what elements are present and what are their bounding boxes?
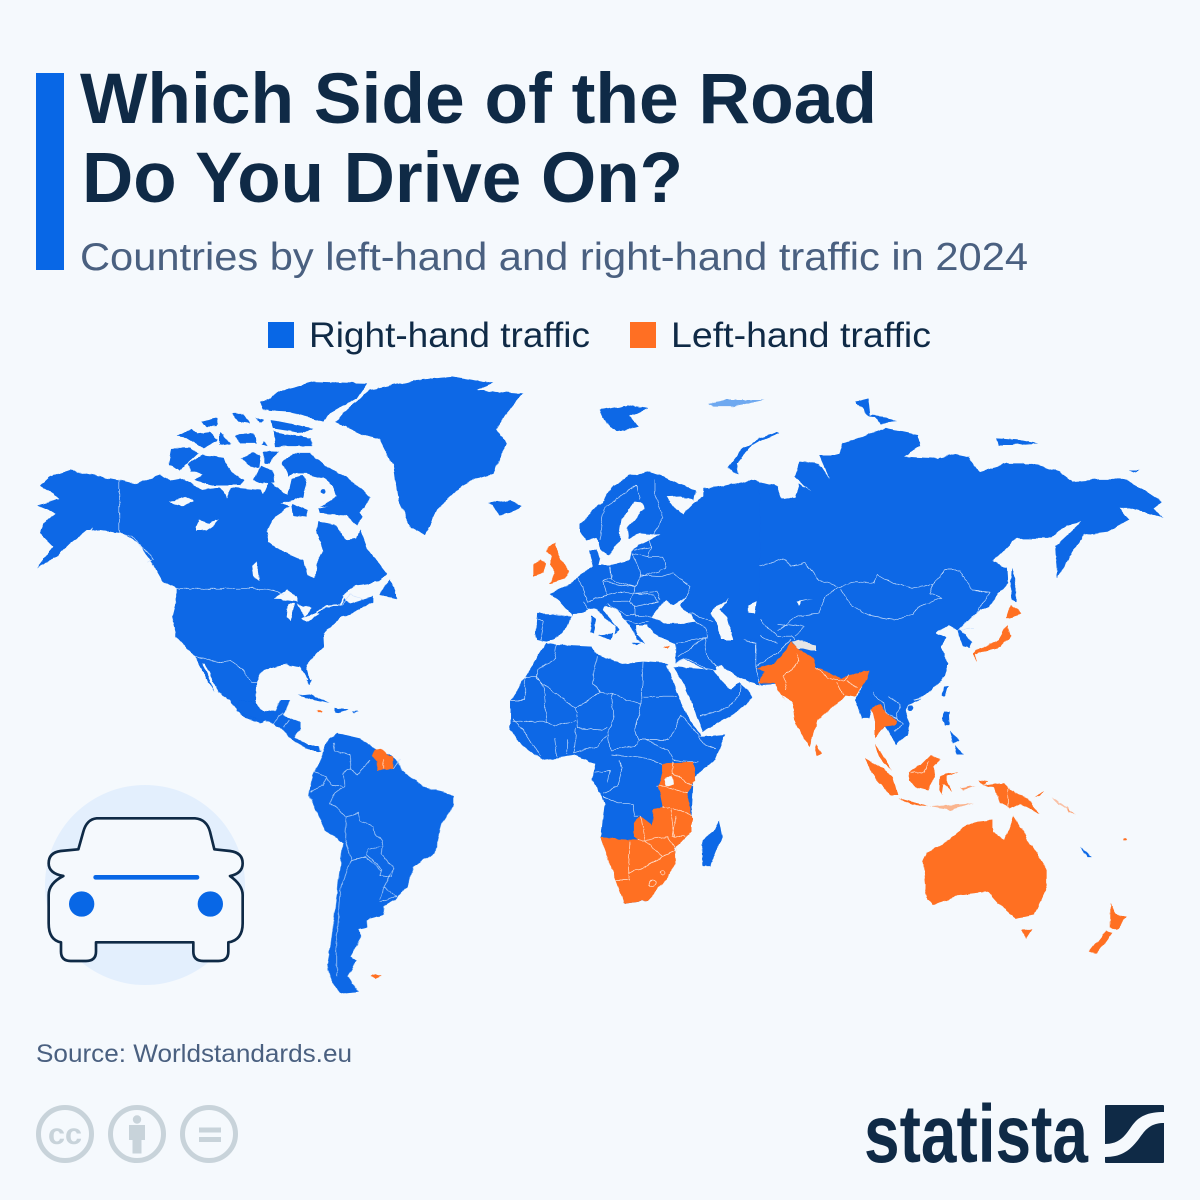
- Foxe Basin lake on Baffin: [321, 489, 326, 494]
- Ellesmere Island: [260, 382, 367, 422]
- icon: no derivatives: [182, 1108, 236, 1160]
- New Zealand: [1089, 903, 1126, 953]
- statista logo: statista: [864, 1089, 1089, 1180]
- Asia and Russia: [600, 398, 1164, 713]
- Greenland: [335, 377, 523, 535]
- car body: [49, 818, 243, 961]
- borders: South America: [273, 712, 400, 977]
- borders: Canada and USA: [119, 480, 363, 683]
- North America and Greenland: [37, 377, 523, 723]
- icon: cc: cc: [48, 1118, 82, 1151]
- Taiwan, Philippines, Hainan: [907, 686, 963, 755]
- Baja California gap: [198, 661, 219, 693]
- lakes: [170, 497, 320, 622]
- Sri Lanka: [816, 744, 822, 756]
- Indonesia and Malaysia islands: [865, 755, 1075, 815]
- title: Which Side of the Road: [80, 60, 877, 139]
- world map: [37, 377, 1164, 993]
- Europe: [533, 472, 760, 649]
- Balkhash: [796, 599, 813, 607]
- Tasmania: [1021, 929, 1032, 939]
- St Lawrence: [317, 595, 345, 612]
- Sicily, Sardinia, Crete: [591, 617, 642, 646]
- Malay Peninsula: [875, 743, 892, 770]
- background circle: [45, 785, 245, 985]
- Central America and South America: [237, 680, 453, 993]
- Arctic Archipelago: [168, 413, 397, 598]
- South Asia: [757, 642, 868, 756]
- icon: cc: [38, 1108, 92, 1160]
- Arabia and Middle East: [666, 665, 755, 768]
- source: Source: Worldstandards.eu: [36, 1040, 352, 1068]
- borders: Europe: [537, 480, 713, 643]
- Falklands and Jamaica: [317, 711, 382, 979]
- Cuba and Caribbean: [298, 680, 358, 712]
- Baltic Sea, Black Sea, Caspian and other inland water: [583, 503, 757, 642]
- Alaska panhandle inlets: [77, 527, 93, 550]
- Southeast Asia and Indonesia: [855, 675, 1075, 815]
- borders: Arabia: [698, 668, 742, 748]
- Japan: [973, 605, 1022, 662]
- Australia: [923, 817, 1047, 918]
- legend: [268, 316, 931, 355]
- borders: India: [784, 653, 858, 695]
- icon: statista mark: [1105, 1105, 1164, 1163]
- borders: Borneo and New Guinea: [910, 762, 1008, 808]
- Pacific islands: [1066, 807, 1127, 857]
- headlights: [69, 891, 223, 917]
- Southern and East Africa: [601, 762, 696, 903]
- Africa, South and Southeast Asia, Oceania: [511, 643, 1127, 953]
- Horn of Africa: [690, 735, 725, 768]
- accent bar: [36, 73, 64, 270]
- subtitle: Countries by left-hand and right-hand traffic in 2024: [80, 236, 1028, 279]
- Lake Victoria: [664, 775, 673, 786]
- Red Sea and Persian Gulf: [666, 665, 755, 737]
- Guyana and Suriname: [372, 748, 393, 772]
- title: [80, 60, 877, 218]
- India and Pakistan: [757, 642, 868, 748]
- Iceland: [488, 500, 522, 515]
- Russian Arctic islands, Sakhalin, Svalbard: [600, 398, 1140, 602]
- borders: Africa: [511, 645, 725, 817]
- illustration: car: [45, 785, 245, 985]
- Great Britain and Ireland: [533, 543, 569, 583]
- title: Do You Drive On?: [82, 139, 683, 218]
- legend: Right-hand traffic: [309, 316, 590, 355]
- borders: Southern Africa: [616, 762, 694, 887]
- Madagascar: [702, 820, 722, 867]
- borders: Asia: [676, 558, 990, 685]
- disputed Kashmir area: [792, 640, 816, 650]
- Mainland Southeast Asia: [855, 675, 922, 745]
- icon: attribution: [110, 1108, 164, 1160]
- grille: [93, 875, 199, 880]
- Africa: [511, 643, 725, 903]
- Thailand: [872, 703, 897, 738]
- Cyprus: [663, 645, 671, 649]
- legend: Left-hand traffic: [671, 316, 931, 355]
- license icons: [38, 1108, 236, 1160]
